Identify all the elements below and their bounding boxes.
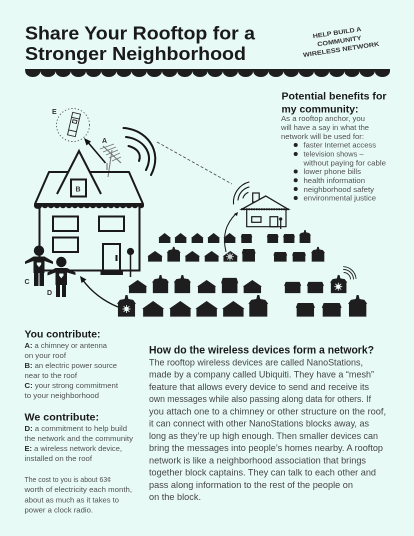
- panel: you contribute: C: your strong commitment: [24, 381, 119, 390]
- text block: network explanation: bring the messages into people’s homes nearby. A rooftop: [149, 443, 383, 454]
- scalloped divider: [25, 69, 390, 77]
- text block: network explanation: own messages while also passing along data for others. If: [149, 394, 371, 405]
- text block: cost note: [23, 475, 132, 514]
- houses: row 4: [117, 295, 367, 317]
- text block: cost note: about as much as it takes to: [24, 496, 119, 504]
- title: Share Your Rooftop for a: [25, 22, 256, 44]
- panel: we contribute: We contribute:: [24, 413, 99, 424]
- panel: potential benefits: environmental justice: [304, 194, 376, 203]
- panel: we contribute: D: a commitment to help build: [24, 424, 127, 433]
- panel: you contribute: [24, 330, 119, 400]
- panel: potential benefits: without paying for cable: [302, 158, 386, 167]
- icon: person C: [25, 246, 53, 286]
- text block: network explanation: feature that allows every device to send and receive its: [149, 382, 369, 393]
- panel: we contribute: [24, 413, 133, 463]
- panel: potential benefits: network will be used for:: [281, 132, 364, 141]
- house roof: [35, 172, 143, 204]
- text block: cost note: The cost to you is about 63¢: [24, 475, 111, 484]
- door: [100, 244, 123, 275]
- panel: we contribute: installed on the roof: [24, 454, 93, 463]
- panel: potential benefits: my community:: [282, 104, 358, 116]
- panel: potential benefits: neighborhood safety: [304, 185, 374, 194]
- houses: row 2: [147, 247, 325, 262]
- text block: network explanation: [149, 358, 386, 503]
- panel: potential benefits: As a rooftop anchor, you: [281, 114, 365, 123]
- text block: cost note: worth of electricity each month,: [23, 485, 132, 494]
- tilted tagline: WIRELESS NETWORK: [303, 41, 380, 59]
- panel: potential benefits: faster Internet access: [304, 140, 376, 150]
- text block: network explanation: long as they’re up high enough. Then smaller devices can: [149, 431, 378, 442]
- text block: network explanation: together block captains. They can talk to each other and: [149, 468, 376, 479]
- scalloped eave: [34, 204, 144, 209]
- arrow: block captain to main house: [80, 276, 118, 307]
- text block: cost note: power a clock radio.: [24, 506, 93, 514]
- lamp post: [127, 248, 134, 277]
- roof box B: B: [76, 186, 81, 194]
- heading: how devices form a network: How do the wireless devices form a network?: [149, 344, 374, 356]
- panel: you contribute: on your roof: [24, 351, 67, 360]
- icon: broadcast arcs: [124, 128, 155, 175]
- text block: network explanation: on the block.: [149, 492, 201, 503]
- icon: antenna: [100, 144, 121, 177]
- icon: wireless device in dotted circle: [56, 108, 90, 142]
- tilted tagline: HELP BUILD A: [312, 26, 362, 40]
- label: E: E: [52, 109, 57, 116]
- icon: right block captain arcs: [344, 267, 356, 279]
- label: D: D: [47, 290, 52, 297]
- label: A: A: [102, 138, 107, 145]
- panel: you contribute: to your neighborhood: [24, 391, 99, 400]
- panel: potential benefits: will have a say in what the: [280, 123, 369, 132]
- illustration: small anchor house: [241, 193, 289, 229]
- panel: you contribute: You contribute:: [24, 330, 100, 340]
- houses: row 1: [158, 230, 311, 243]
- title: Stronger Neighborhood: [25, 43, 246, 64]
- panel: you contribute: A: a chimney or antenna: [24, 341, 108, 350]
- windows: [53, 216, 124, 252]
- text block: network explanation: pass along information to the rest of the people on: [149, 480, 353, 491]
- panel: potential benefits: lower phone bills: [304, 167, 361, 176]
- panel: you contribute: near to the roof: [24, 371, 78, 380]
- tilted tagline: COMMUNITY: [317, 35, 363, 48]
- text block: network explanation: network is like a neighborhood association that brings: [149, 455, 366, 466]
- tilted tagline: [300, 24, 380, 59]
- text block: network explanation: made by a company called Ubiquiti. They have a “mesh”: [149, 370, 374, 381]
- dashed signal line: [157, 142, 232, 184]
- panel: potential benefits: television shows –: [304, 150, 364, 158]
- panel: potential benefits: health information: [304, 176, 365, 185]
- label: C: C: [24, 279, 30, 286]
- arrow: neighbor to small house: [224, 212, 238, 252]
- panel: potential benefits: Potential benefits for: [282, 92, 387, 102]
- panel: you contribute: B: an electric power source: [24, 361, 117, 370]
- illustration: main house: [34, 151, 144, 277]
- arrow: device to antenna: [84, 138, 106, 163]
- house gable: [57, 151, 101, 194]
- houses: row 3: [128, 275, 347, 293]
- title: [25, 22, 256, 64]
- panel: potential benefits: [280, 92, 387, 203]
- text block: network explanation: you attach one to a chimney or other structure on the roof,: [149, 406, 386, 417]
- house walls: [40, 205, 140, 270]
- text block: network explanation: The rooftop wireless devices are called NanoStations,: [149, 358, 363, 368]
- icon: small house arcs: [233, 182, 249, 204]
- panel: we contribute: the network and the community: [24, 434, 133, 443]
- panel: we contribute: E: a wireless network device,: [24, 444, 122, 453]
- icon: person D: [48, 257, 76, 297]
- text block: network explanation: it can connect with other NanoStations blocks away, as: [149, 419, 369, 430]
